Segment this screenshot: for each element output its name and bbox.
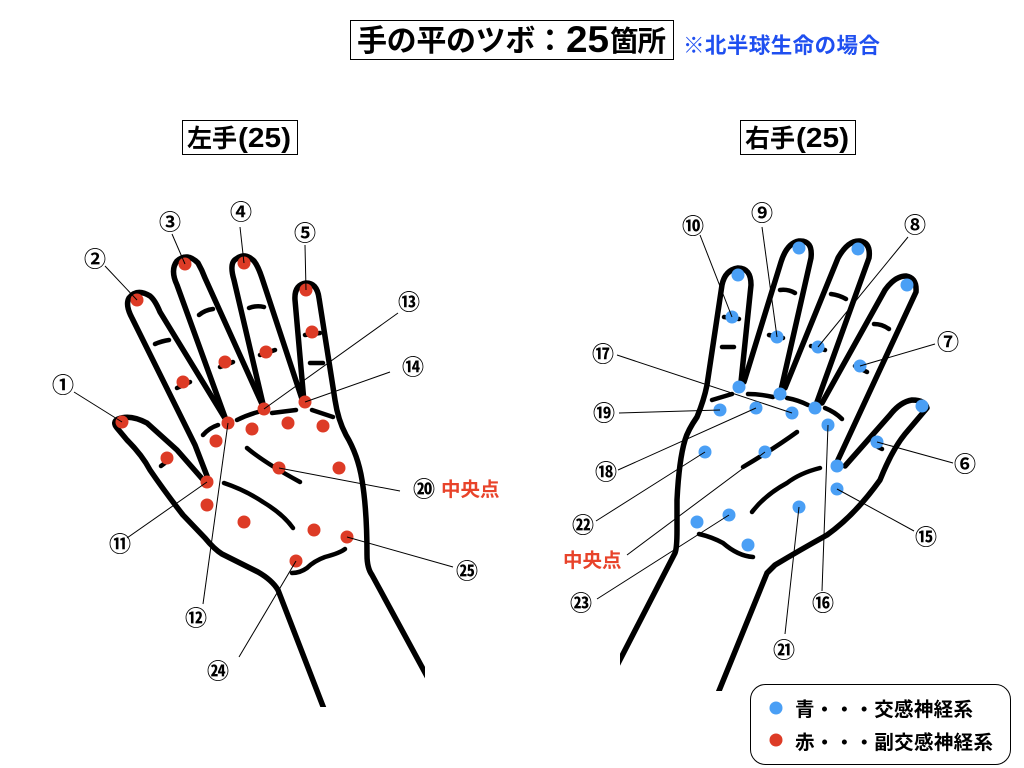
right hand creases [699,290,889,557]
point 23: ㉓ [570,586,592,618]
point 20: ⑳ [413,472,435,504]
point 19 [593,396,726,428]
point 6 [870,436,976,479]
point 24: ㉔ [207,654,229,686]
point 10: ⑩ [682,209,704,241]
point 14: ⑭ [402,350,424,382]
heading: left hand [182,120,298,154]
point 4 [230,195,252,270]
point 22: ㉒ [572,508,594,540]
point 7 [854,325,959,372]
title [350,19,674,60]
point 21 [773,500,806,665]
point 18: ⑱ [595,455,617,487]
point 7: ⑦ [937,325,959,357]
point 9: ⑨ [751,196,773,228]
point 3: ③ [159,205,181,237]
title: 手の平のツボ： [357,25,565,58]
label: center point left: 中央点 [441,479,500,501]
subtitle note: ※北半球生命の場合 [683,34,880,58]
heading: left hand: (25) [238,122,291,153]
point 11: ⑪ [109,527,131,559]
point 15 [830,482,937,552]
point 13 [258,285,420,416]
point 4: ④ [230,195,252,227]
point 1 [52,368,128,428]
point 25: ㉕ [456,554,478,586]
point 2 [84,242,144,306]
point 17 [592,337,798,420]
left hand creases [155,306,345,573]
point 16: ⑯ [812,586,834,618]
point 13: ⑬ [398,285,420,317]
point 5: ⑤ [294,216,316,248]
legend: blue: 青・・・交感神経系 [795,698,973,721]
point 16 [812,418,834,618]
legend: red: 赤・・・副交感神経系 [795,731,993,754]
point 17: ⑰ [592,337,614,369]
point 6: ⑥ [954,447,976,479]
heading: right hand: (25) [796,122,849,153]
point 8: ⑧ [904,208,926,240]
left hand outline [115,256,435,727]
point 3 [159,205,192,270]
point 20 [272,462,435,504]
point 25 [340,530,478,586]
point 21: ㉑ [773,633,795,665]
label: center point right: 中央点 [563,550,622,572]
point: center point right [627,446,772,555]
point 10 [682,209,738,324]
point 1: ① [52,368,74,400]
point 22 [572,446,712,540]
point 24 [207,554,302,686]
point 2: ② [84,242,106,274]
point 8 [812,208,926,354]
heading: right hand: 右手 [745,125,795,153]
heading: left hand: 左手 [187,125,237,153]
point 9 [751,196,784,344]
right hand unnumbered blue points [690,242,928,552]
point 5 [294,216,316,296]
point 19: ⑲ [593,396,615,428]
point 12 [185,416,234,633]
point 12: ⑫ [185,601,207,633]
point 18 [595,402,762,487]
point 14 [298,350,424,408]
right hand outline [608,241,927,708]
title: 25 [566,19,609,60]
heading: right hand [740,120,856,154]
point 11 [109,476,214,559]
legend [750,684,1010,764]
point 15: ⑮ [915,520,937,552]
left hand unnumbered red points [160,326,346,536]
point 23 [570,508,736,618]
title: 箇所 [610,26,666,58]
